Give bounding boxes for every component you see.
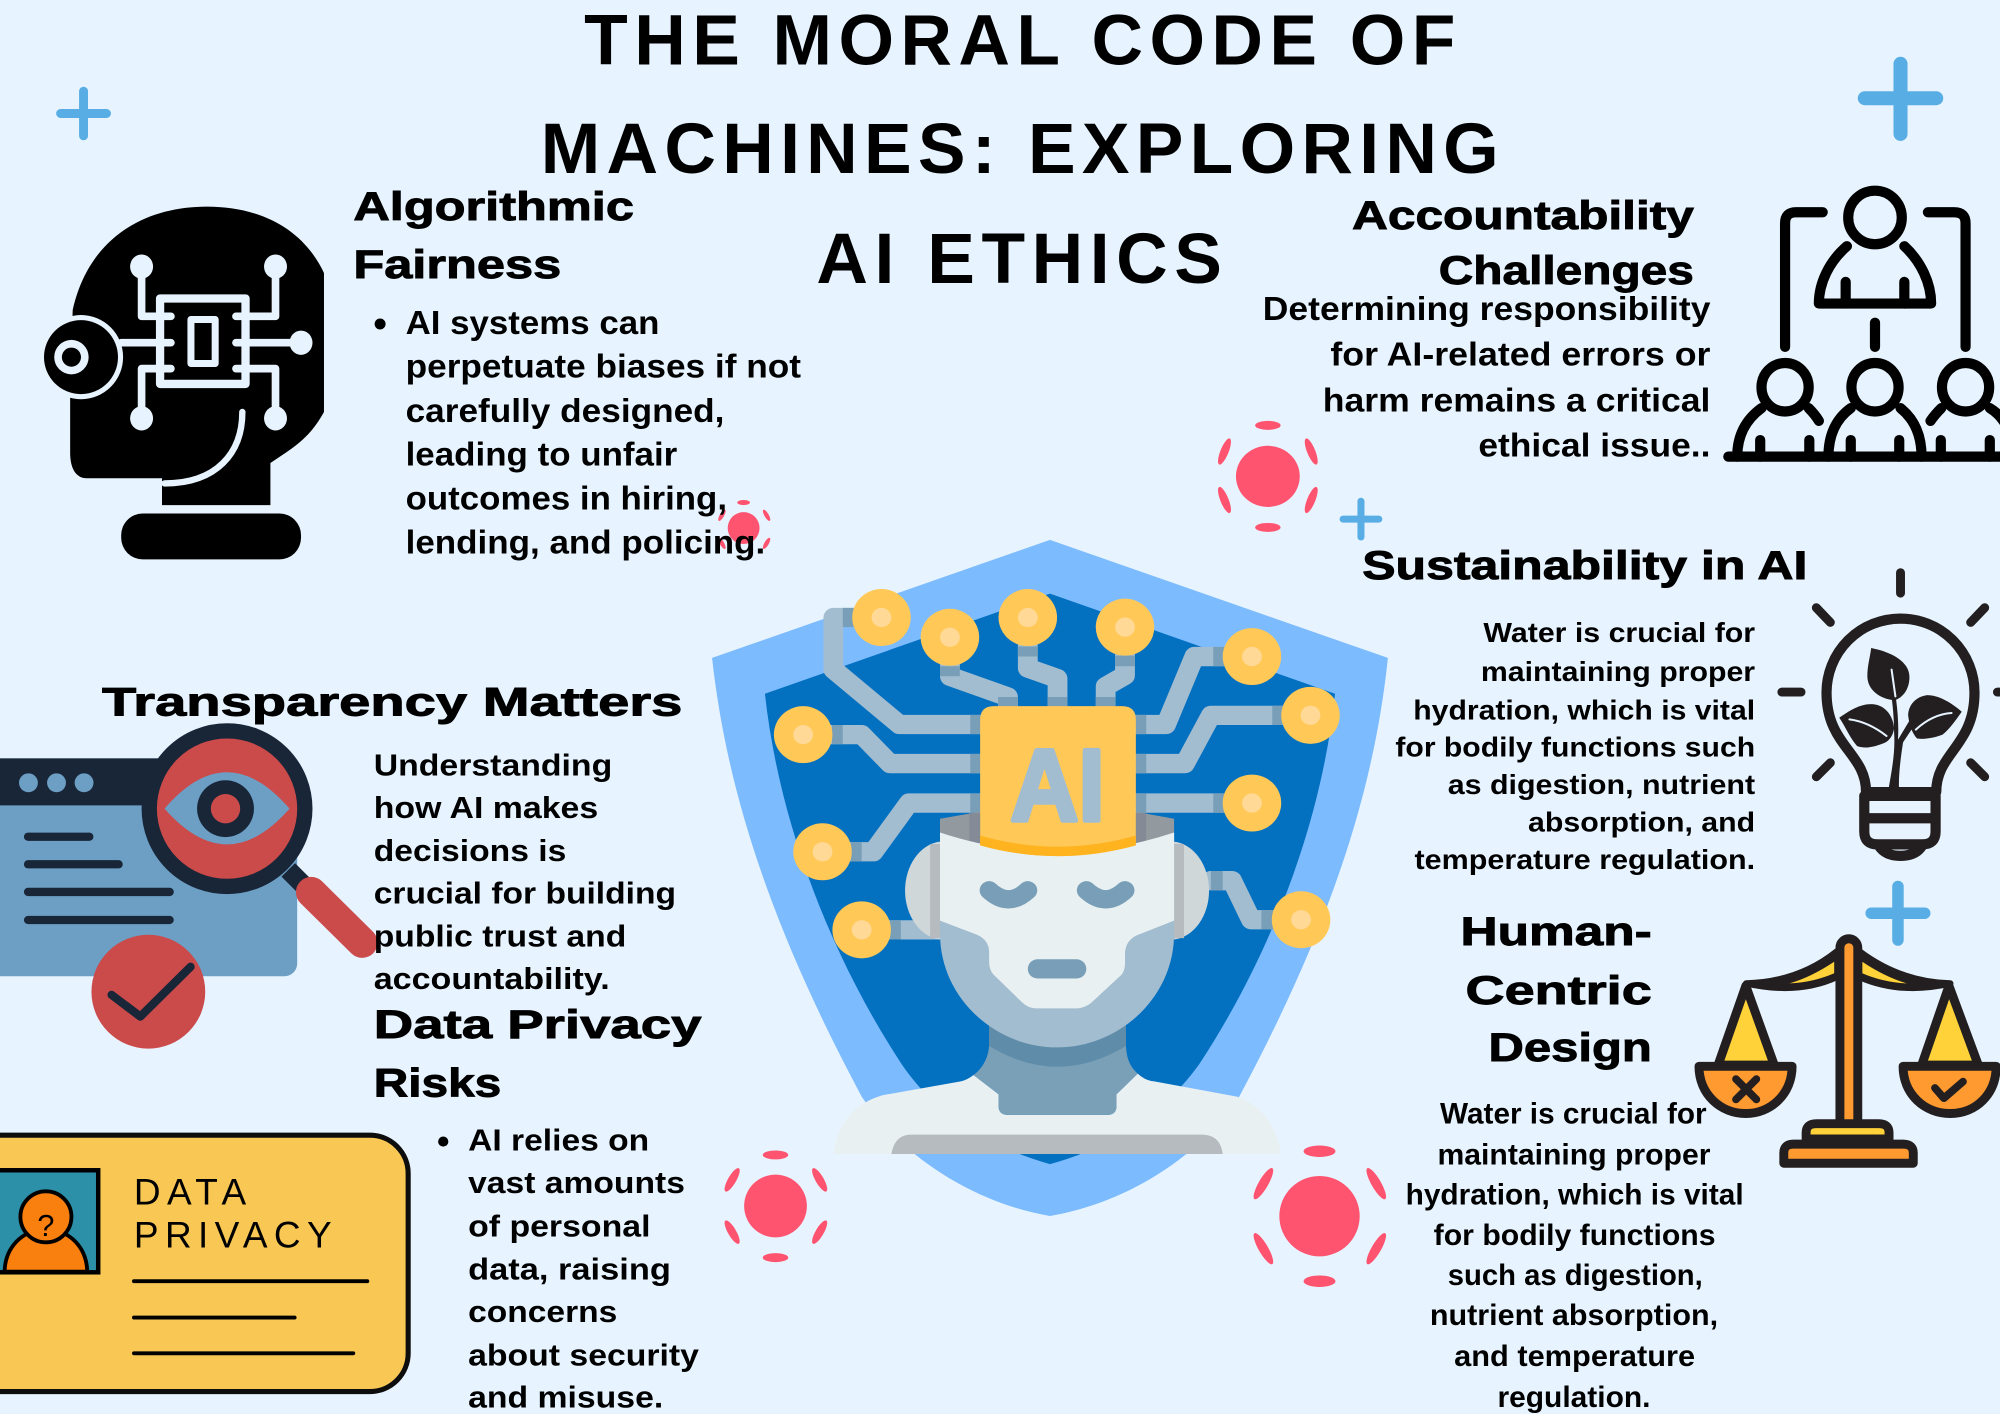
decoration: blue plus above scales — [1871, 886, 1925, 940]
decoration: blue plus top right — [1865, 64, 1936, 134]
text block: sustainability body: Water is crucial for — [1483, 617, 1755, 648]
text block: algorithmic fairness body: carefully designed, — [406, 393, 724, 430]
text block: human-centric body: nutrient absorption, — [1430, 1299, 1718, 1332]
text block: data privacy body: of personal — [468, 1210, 651, 1244]
text block: transparency body: Understanding — [374, 748, 612, 782]
text block: human-centric body: regulation. — [1497, 1381, 1651, 1414]
panel: data privacy risks — [374, 1003, 702, 1414]
heading: human-centric design: Design — [1489, 1026, 1652, 1070]
text block: accountability body: ethical issue.. — [1478, 428, 1710, 465]
heading: data privacy risks: Data Privacy — [374, 1003, 702, 1047]
panel: sustainability in AI — [1362, 544, 1807, 875]
heading: human-centric design — [1460, 910, 1652, 1070]
title: AI ETHICS — [816, 219, 1222, 299]
icon: lightbulb with plant — [1782, 573, 2000, 856]
heading: data privacy risks — [374, 1003, 702, 1105]
title: MACHINES: EXPLORING — [541, 109, 1499, 189]
text block: data privacy body: vast amounts — [468, 1166, 685, 1200]
text block: sustainability body: as digestion, nutrient — [1448, 769, 1755, 800]
text block: algorithmic fairness body: AI systems can — [406, 305, 659, 342]
icon: head with circuit chip — [39, 207, 324, 559]
panel: transparency matters — [102, 681, 682, 996]
text block: data privacy body: and misuse. — [468, 1380, 663, 1414]
text block: transparency body: crucial for building — [374, 877, 676, 911]
heading: algorithmic fairness: Fairness — [353, 243, 561, 287]
text block: transparency body: public trust and — [374, 919, 626, 953]
text block: human-centric body: for bodily functions — [1434, 1219, 1716, 1252]
text block: data privacy body: data, raising — [468, 1252, 671, 1286]
decoration: blue plus middle — [1343, 501, 1379, 537]
text block: data privacy body: AI relies on — [468, 1123, 649, 1157]
icon: data privacy card: PRIVACY — [134, 1214, 332, 1255]
decoration: pink sun upper right — [1215, 421, 1320, 532]
heading: accountability challenges: Accountability — [1352, 194, 1694, 238]
icon: balance scales — [1699, 939, 1996, 1163]
heading: sustainability in AI: Sustainability in AI — [1362, 544, 1807, 588]
heading: transparency matters: Transparency Matters — [102, 681, 682, 725]
icon: center AI robot head in shield: AI — [1010, 728, 1105, 842]
text block: data privacy body: about security — [468, 1338, 699, 1372]
panel: accountability challenges — [1263, 194, 1711, 465]
heading: data privacy risks: Risks — [374, 1061, 501, 1105]
heading: accountability challenges — [1352, 194, 1694, 293]
text block: algorithmic fairness body: outcomes in hiring, — [406, 481, 727, 518]
text block: accountability body — [1263, 291, 1711, 465]
icon: center AI robot head in shield — [712, 540, 1388, 1216]
text block: transparency body: accountability. — [374, 962, 610, 996]
icon: data privacy card: DATA — [134, 1172, 247, 1213]
text block: human-centric body: maintaining proper — [1438, 1139, 1710, 1172]
text block: algorithmic fairness body — [375, 305, 801, 562]
icon: data privacy card: ? — [37, 1209, 54, 1243]
text block: human-centric body: and temperature — [1454, 1340, 1695, 1373]
panel: human-centric design — [1406, 910, 1744, 1414]
text block: sustainability body: for bodily functions such — [1395, 731, 1755, 762]
text block: transparency body: how AI makes — [374, 791, 598, 825]
text block: accountability body: harm remains a critical — [1323, 382, 1710, 419]
text block: transparency body — [374, 748, 676, 996]
text block: sustainability body — [1395, 617, 1755, 875]
text block: accountability body: for AI-related errors or — [1330, 336, 1711, 373]
text block: sustainability body: maintaining proper — [1481, 656, 1755, 687]
text block: algorithmic fairness body: lending, and policing. — [406, 525, 765, 562]
text block: algorithmic fairness body: perpetuate biases if not — [406, 349, 801, 386]
text block: human-centric body — [1406, 1098, 1744, 1414]
decoration: blue plus top left — [61, 91, 107, 136]
text block: data privacy body — [438, 1123, 699, 1414]
heading: accountability challenges: Challenges — [1439, 249, 1694, 293]
title — [541, 0, 1499, 299]
heading: algorithmic fairness — [353, 185, 634, 287]
panel: algorithmic fairness — [353, 185, 801, 562]
text block: data privacy body: concerns — [468, 1295, 617, 1329]
text block: sustainability body: hydration, which is vital — [1413, 694, 1755, 725]
decoration: pink sun lower left — [722, 1150, 830, 1262]
text block: sustainability body: temperature regulation. — [1415, 844, 1755, 875]
heading: human-centric design: Centric — [1466, 969, 1652, 1013]
text block: human-centric body: Water is crucial for — [1440, 1098, 1707, 1131]
title: THE MORAL CODE OF — [584, 0, 1455, 80]
heading: human-centric design: Human- — [1460, 910, 1652, 954]
text block: human-centric body: hydration, which is vital — [1406, 1179, 1744, 1212]
text block: sustainability body: absorption, and — [1528, 807, 1755, 838]
icon: people hierarchy — [1728, 191, 2000, 457]
decoration: pink sun lower right — [1250, 1146, 1389, 1287]
text block: transparency body: decisions is — [374, 834, 566, 868]
decoration: pink sun small — [717, 500, 772, 550]
icon: data privacy card — [0, 1135, 408, 1392]
text block: accountability body: Determining responsibility — [1263, 291, 1711, 328]
text block: algorithmic fairness body: leading to unfair — [406, 437, 677, 474]
icon: browser window with magnifier and check — [0, 731, 362, 1049]
text block: human-centric body: such as digestion, — [1448, 1259, 1703, 1292]
heading: algorithmic fairness: Algorithmic — [353, 185, 634, 229]
